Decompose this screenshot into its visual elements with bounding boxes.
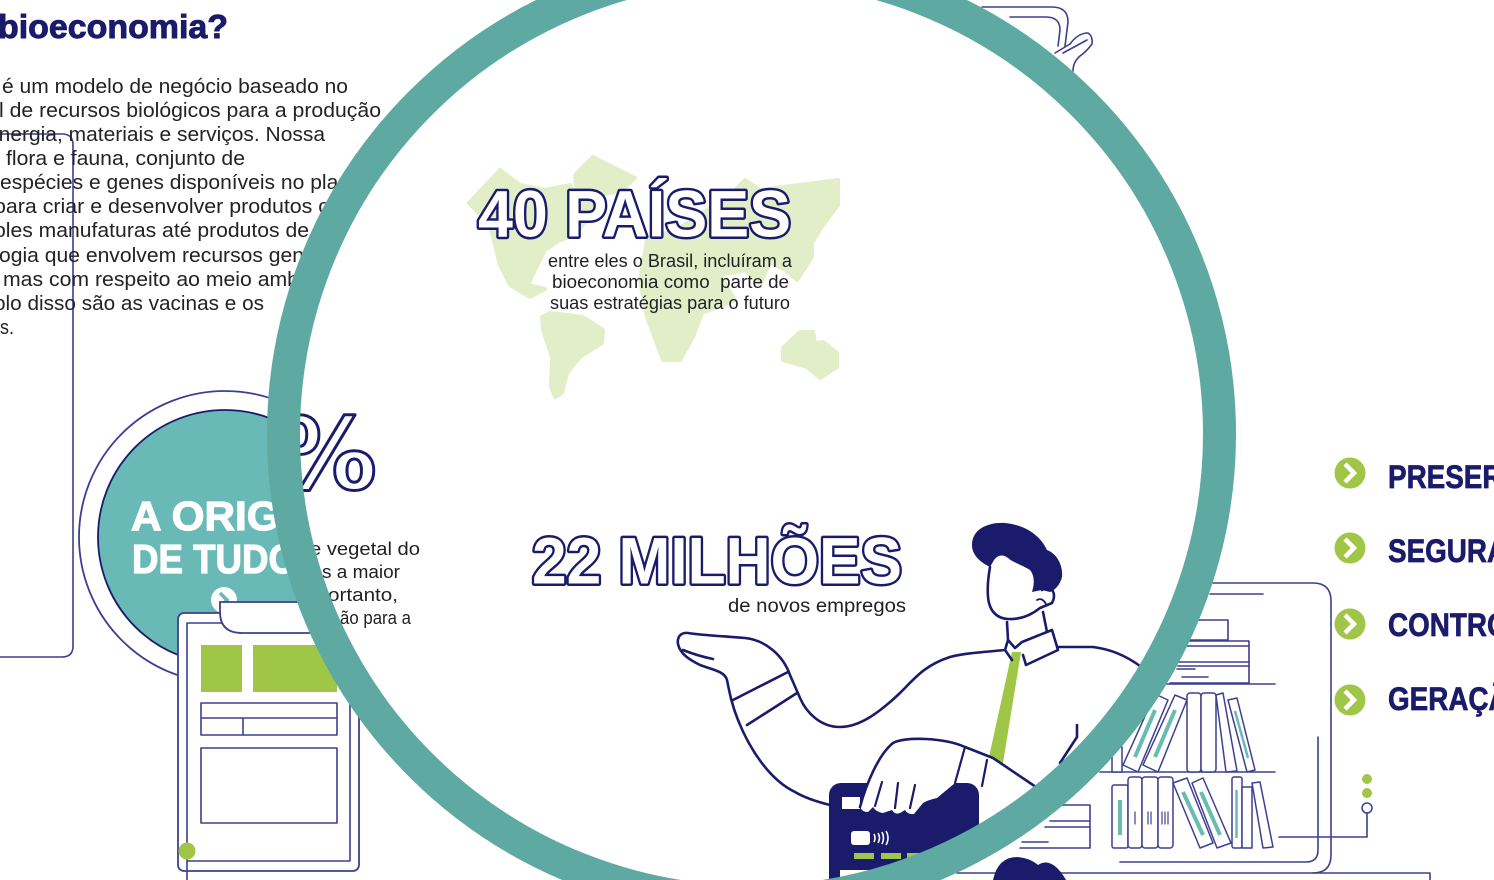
badge: a origem de tudo: DE TUDO bbox=[132, 536, 297, 582]
stat: percentage: % bbox=[277, 396, 377, 513]
heading: bioeconomia: bioeconomia? bbox=[0, 8, 228, 45]
white circle background bbox=[284, 0, 1220, 880]
stat: 22 milhões: 22 MILHÕES bbox=[532, 524, 902, 598]
list: benefits bbox=[1334, 458, 1494, 717]
text block: definition of bioeconomy: mas com respeito ao meio amb bbox=[3, 269, 299, 291]
text block: definition of bioeconomy: espécies e genes disponíveis no plan bbox=[0, 172, 350, 194]
text block: percentage caption: ortanto, bbox=[328, 585, 398, 605]
text block: definition of bioeconomy: flora e fauna, conjunto de bbox=[6, 148, 245, 170]
list item: controle bbox=[1334, 608, 1494, 643]
list item: preservação bbox=[1334, 458, 1494, 495]
hand and forearm bbox=[860, 783, 954, 814]
text block: countries caption bbox=[548, 251, 793, 313]
text block: countries caption: bioeconomia como parte de bbox=[552, 272, 789, 292]
pagination dots and connector bbox=[1279, 774, 1372, 837]
illustration: businessman bbox=[678, 523, 1140, 880]
teal ring bbox=[284, 0, 1220, 880]
text block: countries caption: entre eles o Brasil, incluíram a bbox=[548, 251, 793, 271]
list item: segurança bbox=[1334, 532, 1494, 569]
illustration: bookshelf bbox=[957, 583, 1430, 880]
text block: definition of bioeconomy: l de recursos biológicos para a produção bbox=[0, 100, 381, 122]
face bbox=[988, 567, 1054, 619]
icon: clipboard bbox=[178, 602, 359, 880]
circle contents bbox=[277, 157, 1140, 880]
text block: definition of bioeconomy: ples manufaturas até produtos de bbox=[0, 220, 309, 242]
text block: percentage caption: s a maior bbox=[322, 562, 400, 582]
stat: 40 países: 40 PAÍSES bbox=[478, 176, 791, 250]
text block: percentage caption: ão para a bbox=[340, 608, 412, 628]
text block: countries caption: suas estratégias para o futuro bbox=[550, 293, 790, 313]
text block: definition of bioeconomy: plo disso são as vacinas e os bbox=[0, 293, 264, 315]
text block: definition of bioeconomy: s. bbox=[0, 317, 14, 339]
list item: geração bbox=[1334, 681, 1494, 717]
text block: definition of bioeconomy: ogia que envolvem recursos gen bbox=[0, 245, 304, 267]
stat: 40 países: 40 PAÍSES bbox=[478, 176, 791, 250]
text block: definition of bioeconomy: para criar e desenvolver produtos c bbox=[0, 196, 329, 218]
text block: percentage caption: e vegetal do bbox=[310, 539, 420, 559]
badge: a origem de tudo: A ORIGEM bbox=[131, 493, 343, 539]
stat: 22 milhões: 22 MILHÕES bbox=[532, 524, 902, 598]
hair bbox=[972, 523, 1062, 592]
credit card bbox=[829, 783, 979, 880]
text block: definition of bioeconomy: é um modelo de negócio baseado no bbox=[2, 76, 348, 98]
neck and collar bbox=[1005, 612, 1058, 665]
panel: left text frame bbox=[0, 134, 73, 657]
body and pointing arm bbox=[678, 633, 1005, 805]
icon: tablet and hand bbox=[982, 7, 1092, 71]
world map bbox=[469, 157, 838, 397]
tie bbox=[989, 652, 1021, 763]
icon: second person hair bbox=[993, 857, 1066, 880]
text block: jobs caption: de novos empregos bbox=[728, 596, 906, 617]
badge: a origem de tudo bbox=[79, 391, 371, 683]
text block: percentage caption bbox=[310, 539, 420, 628]
text block: definition of bioeconomy bbox=[0, 76, 381, 339]
